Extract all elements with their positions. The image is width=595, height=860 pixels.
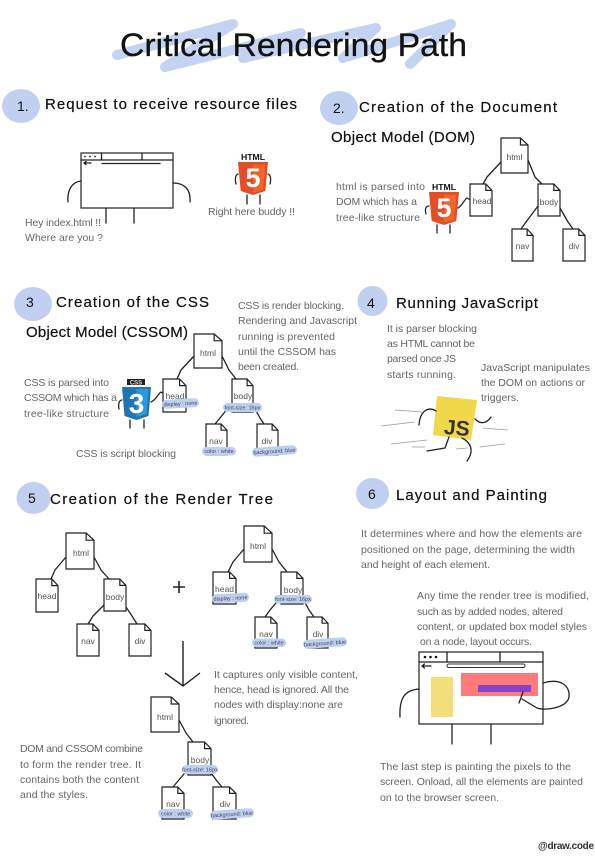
style tag: color white: color : white	[254, 640, 284, 646]
chart: render tree: nav	[166, 799, 181, 809]
speech: browser asks: Hey index.html !!	[25, 217, 101, 229]
chart: CSSOM tree: div	[313, 629, 324, 639]
reflow note: content, or updated box model styles	[417, 621, 587, 633]
painted yellow block	[431, 677, 453, 717]
chart: DOM tree: body	[106, 592, 125, 602]
layout description: It determines where and how the elements are	[361, 528, 582, 540]
speech: html answers: Right here buddy !!	[208, 206, 295, 218]
visible content note: hence, head is ignored. All the	[214, 684, 349, 696]
CSSOM description	[24, 377, 117, 420]
chart: CSSOM tree: head	[215, 584, 234, 594]
step 2 number badge	[320, 91, 358, 125]
step 4 heading: Running JavaScript	[396, 295, 539, 312]
chart: DOM tree: head	[38, 591, 57, 601]
chart: CSSOM tree: html	[200, 348, 216, 358]
chart: render tree: html	[157, 712, 173, 722]
step 2 number badge: 2.	[333, 100, 345, 116]
speech: browser asks	[25, 217, 103, 244]
CSSOM description: CSS is parsed into	[24, 377, 109, 389]
painting description	[380, 761, 583, 804]
style tag: background blue: background: blue	[253, 448, 296, 456]
step 3 number badge: 3	[26, 294, 34, 310]
chart: DOM tree: nav	[81, 636, 96, 646]
panel: step 4 javascript	[358, 286, 590, 461]
visible content note	[214, 669, 358, 727]
chart: DOM tree: div	[135, 636, 146, 646]
chart: CSSOM tree	[212, 526, 347, 649]
step 2 description: html is parsed into	[336, 181, 425, 193]
step 4 number badge: 4	[367, 295, 375, 311]
step 2 description	[336, 181, 425, 224]
icon: css3 character: CSS	[130, 380, 142, 386]
layout description	[361, 528, 582, 571]
step 1 number badge	[2, 89, 40, 123]
render blocking note: Rendering and Javascript	[238, 315, 357, 327]
step 5 number badge: 5	[28, 490, 36, 506]
render blocking note: running is prevented	[238, 331, 335, 343]
dom manipulation note: the DOM on actions or	[481, 377, 586, 389]
panel: step 6 layout and painting	[356, 478, 594, 852]
render tree description: and the styles.	[20, 789, 88, 801]
panel: step 5 render tree	[16, 482, 358, 820]
step 2 description: tree-like structure	[336, 212, 420, 224]
step 3 heading: Object Model (CSSOM)	[26, 324, 188, 341]
chart: DOM tree: body	[540, 197, 559, 207]
render tree description: DOM and CSSOM combine	[20, 743, 143, 755]
panel: step 3 CSSOM	[14, 287, 357, 460]
chart: DOM tree: nav	[516, 241, 530, 251]
CSSOM description: tree-like structure	[24, 408, 109, 420]
dom manipulation note: triggers.	[481, 392, 519, 404]
style tag: background blue: background: blue	[211, 811, 253, 819]
chart: DOM tree	[36, 533, 151, 656]
chart: CSSOM tree: div	[262, 436, 273, 446]
painting description: screen. Onload, all the elements are painted	[380, 776, 583, 788]
style tag: font-size: font-size: 16px	[225, 406, 261, 412]
painted red block	[461, 673, 538, 696]
dom manipulation note: JavaScript manipulates	[481, 362, 590, 374]
icon: browser painting character	[400, 652, 569, 744]
step 2 heading	[331, 99, 558, 146]
step 1 number badge: 1.	[17, 98, 29, 114]
icon: running js character: JS	[443, 416, 471, 441]
icon: html5 character	[235, 153, 271, 204]
style tag: font-size: font-size: 16px	[275, 597, 311, 603]
icon: css3 character	[119, 379, 165, 428]
panel: step 2 DOM	[320, 91, 585, 261]
reflow note: such as by added nodes, altered	[417, 606, 563, 618]
layout description: and height of each element.	[361, 559, 490, 571]
step 3 number badge	[14, 287, 52, 321]
title: Critical Rendering Path	[120, 27, 467, 63]
render blocking note: been created.	[238, 361, 299, 373]
reflow note: Any time the render tree is modified,	[417, 590, 589, 602]
painted purple block	[478, 685, 531, 692]
chart: render tree: div	[220, 799, 231, 809]
reflow note: on a node, layout occurs.	[420, 636, 532, 648]
render tree description	[20, 743, 143, 801]
chart: render tree: body	[191, 755, 210, 765]
chart: DOM tree: head	[473, 196, 492, 206]
parser blocking note	[387, 323, 477, 381]
icon: css3 character: 3	[129, 388, 144, 419]
chart: DOM tree: html	[506, 152, 523, 162]
reflow note	[417, 590, 589, 648]
chart: DOM tree: div	[569, 241, 580, 251]
speech: browser asks: Where are you ?	[25, 232, 103, 244]
icon: running js character	[381, 396, 508, 461]
style tag: display none: display : none	[163, 401, 198, 408]
parser blocking note: It is parser blocking	[387, 323, 477, 335]
dom manipulation note	[481, 362, 590, 404]
chart: CSSOM tree: html	[250, 541, 266, 551]
render blocking note: CSS is render blocking.	[238, 300, 344, 312]
step 6 number badge: 6	[368, 486, 376, 502]
style tag: background blue: background: blue	[304, 640, 346, 648]
step 3 heading	[26, 294, 209, 341]
style tag: color white: color : white	[204, 449, 234, 455]
step 5 heading: Creation of the Render Tree	[50, 491, 273, 508]
style tag: font-size: font-size: 16px	[182, 768, 218, 774]
render tree description: contains both the content	[20, 774, 139, 786]
step 5 number badge	[16, 482, 50, 514]
step 1 heading: Request to receive resource files	[45, 96, 297, 113]
step 6 number badge	[356, 478, 389, 509]
parser blocking note: as HTML cannot be	[387, 338, 475, 350]
chart: CSSOM tree: body	[234, 391, 253, 401]
icon: html5 with arm	[425, 183, 472, 233]
chart: render tree	[151, 697, 254, 820]
parser blocking note: starts running.	[387, 369, 456, 381]
chart: DOM tree: html	[73, 548, 89, 558]
arrow: down to render tree	[165, 641, 200, 686]
step 2 description: DOM which has a	[336, 196, 417, 208]
step 2 heading: Creation of the Document	[359, 99, 558, 116]
step 4 number badge	[358, 286, 388, 316]
style tag: display none: display : none	[213, 595, 248, 603]
panel: step 1 request	[2, 89, 297, 244]
chart: CSSOM tree: nav	[259, 629, 274, 639]
chart: CSSOM tree: body	[284, 585, 303, 595]
chart: CSSOM tree: head	[166, 391, 185, 401]
visible content note: It captures only visible content,	[214, 669, 358, 681]
chart: CSSOM tree: nav	[209, 436, 224, 446]
style tag: color white: color : white	[161, 812, 190, 818]
chart: DOM tree	[470, 138, 585, 261]
painting description: on to the browser screen.	[380, 792, 499, 804]
step 2 heading: Object Model (DOM)	[331, 129, 475, 146]
layout description: positioned on the page, determining the width	[361, 544, 575, 556]
step 6 heading: Layout and Painting	[396, 487, 547, 504]
chart: CSSOM tree	[162, 334, 297, 457]
script blocking note: CSS is script blocking	[76, 448, 176, 460]
CSSOM description: CSSOM which has a	[24, 392, 117, 404]
icon: browser character	[68, 153, 190, 223]
visible content note: ignored.	[214, 715, 249, 727]
parser blocking note: parsed once JS	[387, 353, 456, 365]
visible content note: nodes with display:none are	[214, 699, 343, 711]
painting description: The last step is painting the pixels to the	[380, 761, 571, 773]
icon: plus	[173, 581, 185, 593]
render blocking note	[238, 300, 357, 373]
render tree description: to form the render tree. It	[20, 759, 141, 771]
render blocking note: until the CSSOM has	[238, 346, 336, 358]
credit: @draw.code	[538, 841, 594, 852]
step 3 heading: Creation of the CSS	[56, 294, 209, 311]
